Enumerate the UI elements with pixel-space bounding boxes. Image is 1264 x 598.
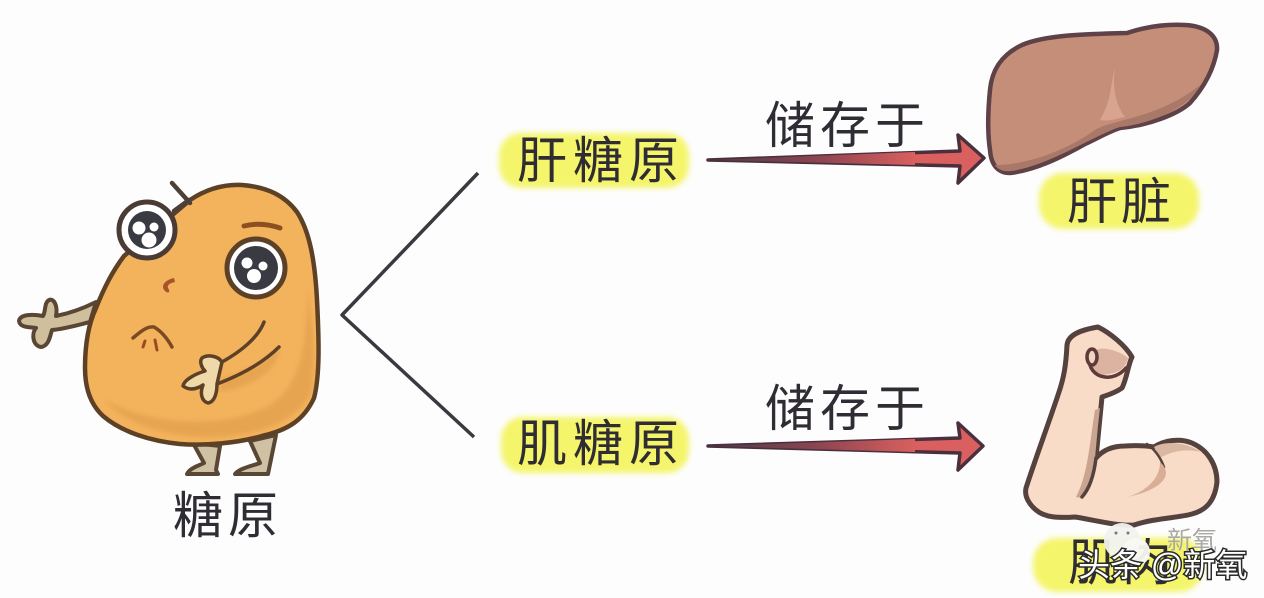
left arm <box>19 300 96 347</box>
label: 肌肉 with highlight <box>1033 535 1203 592</box>
label: 储存于 bottom: 储存于 <box>765 381 930 437</box>
mouth <box>133 327 172 350</box>
watermark: 头条 @新氧: 头条 @新氧 <box>1078 547 1247 583</box>
label: 肝脏 with highlight: 肝脏 <box>1067 174 1175 230</box>
left eye <box>119 202 175 258</box>
arrow: muscle glycogen to muscle <box>708 423 983 470</box>
icon: liver <box>988 25 1217 173</box>
stem <box>172 183 190 211</box>
label: 储存于 top: 储存于 <box>765 98 930 154</box>
watermark: 新氧 small: 新氧 <box>1167 527 1217 555</box>
legs and feet <box>187 435 276 474</box>
watermark: WeChat icon <box>1104 523 1150 566</box>
arrow: liver glycogen to liver <box>708 135 984 183</box>
right arm and hand <box>183 322 280 403</box>
label: 肌糖原 with highlight: 肌糖原 <box>517 416 685 472</box>
body shading <box>105 290 314 437</box>
nose <box>163 278 175 292</box>
label: 肝糖原 with highlight: 肝糖原 <box>517 133 685 189</box>
label: 糖原: 糖原 <box>173 488 283 544</box>
body <box>85 185 319 445</box>
character: glycogen mascot <box>19 183 319 474</box>
branch lines <box>342 173 478 437</box>
label: 肌肉 with highlight: 肌肉 <box>1068 535 1176 591</box>
label: 肝脏 with highlight <box>1039 173 1199 230</box>
icon: flexed arm <box>1026 327 1217 525</box>
eyebrow <box>244 224 280 228</box>
right eye <box>227 239 285 297</box>
